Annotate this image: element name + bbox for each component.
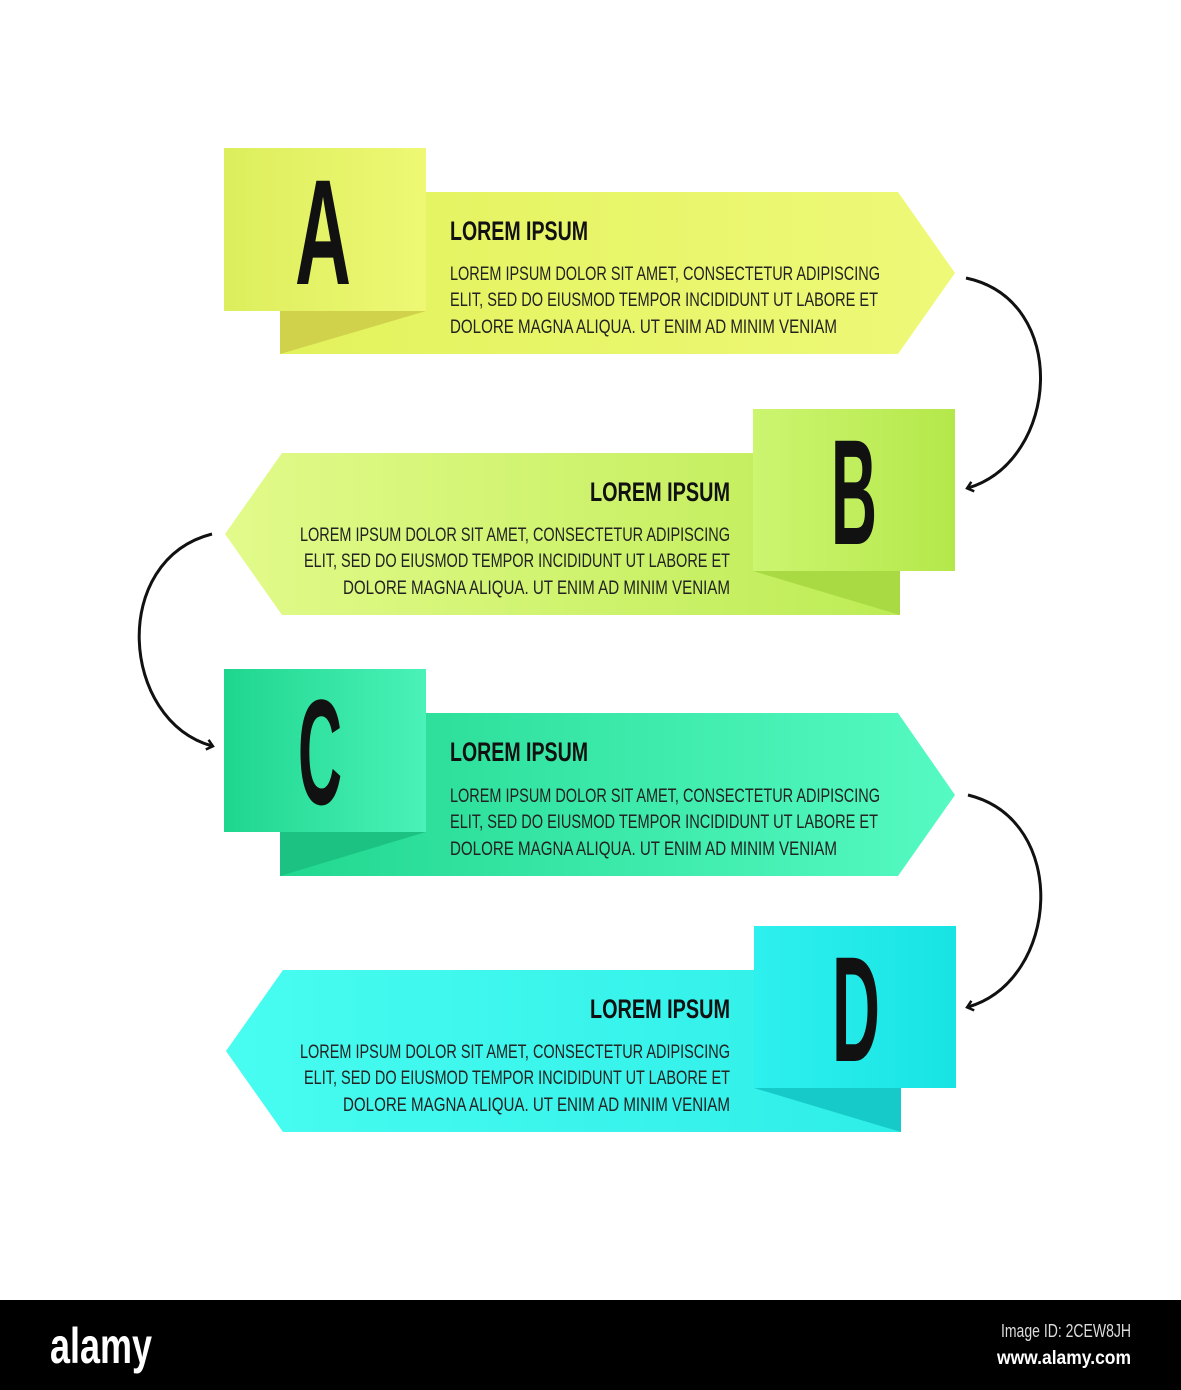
body B (300, 525, 730, 599)
step B: B (831, 408, 877, 576)
step A (224, 148, 955, 354)
square B (753, 409, 955, 571)
body A: DOLORE MAGNA ALIQUA. UT ENIM AD MINIM VENIAM (450, 317, 837, 338)
step D: D (832, 925, 880, 1093)
footer bar (0, 1300, 1181, 1390)
band D (226, 970, 901, 1132)
arrow C to D (968, 795, 1041, 1007)
body C: LOREM IPSUM DOLOR SIT AMET, CONSECTETUR ADIPISCING (450, 786, 880, 807)
body D: LOREM IPSUM DOLOR SIT AMET, CONSECTETUR ADIPISCING (300, 1042, 730, 1063)
body C: DOLORE MAGNA ALIQUA. UT ENIM AD MINIM VENIAM (450, 839, 837, 860)
heading A: LOREM IPSUM (450, 216, 588, 246)
arrow A to B (966, 278, 1041, 488)
heading D: LOREM IPSUM (590, 994, 730, 1024)
letter A: A (295, 148, 351, 316)
body A: LOREM IPSUM DOLOR SIT AMET, CONSECTETUR ADIPISCING (450, 264, 880, 285)
footer id: Image ID: 2CEW8JH (1001, 1321, 1131, 1341)
body B: LOREM IPSUM DOLOR SIT AMET, CONSECTETUR ADIPISCING (300, 525, 730, 546)
footer logo: alamy (50, 1318, 152, 1374)
footer url: www.alamy.com (996, 1348, 1131, 1369)
body C: ELIT, SED DO EIUSMOD TEMPOR INCIDIDUNT UT LABORE ET (450, 812, 878, 833)
step C (224, 668, 955, 876)
arrow B to C (139, 534, 212, 746)
band A (280, 192, 955, 354)
heading B: LOREM IPSUM (590, 477, 730, 507)
body C (450, 786, 880, 860)
step C: C (298, 668, 342, 836)
step B (225, 408, 955, 615)
body D (300, 1042, 730, 1116)
band B (225, 453, 900, 615)
body A (450, 264, 880, 338)
body D: DOLORE MAGNA ALIQUA. UT ENIM AD MINIM VENIAM (343, 1095, 730, 1116)
square A (224, 148, 426, 311)
heading C: LOREM IPSUM (450, 737, 588, 767)
square D (754, 926, 956, 1088)
body B: DOLORE MAGNA ALIQUA. UT ENIM AD MINIM VENIAM (343, 578, 730, 599)
step D (226, 925, 956, 1132)
body A: ELIT, SED DO EIUSMOD TEMPOR INCIDIDUNT UT LABORE ET (450, 290, 878, 311)
body D: ELIT, SED DO EIUSMOD TEMPOR INCIDIDUNT UT LABORE ET (304, 1068, 730, 1089)
square C (224, 669, 426, 832)
body B: ELIT, SED DO EIUSMOD TEMPOR INCIDIDUNT UT LABORE ET (304, 551, 730, 572)
band C (280, 713, 955, 876)
